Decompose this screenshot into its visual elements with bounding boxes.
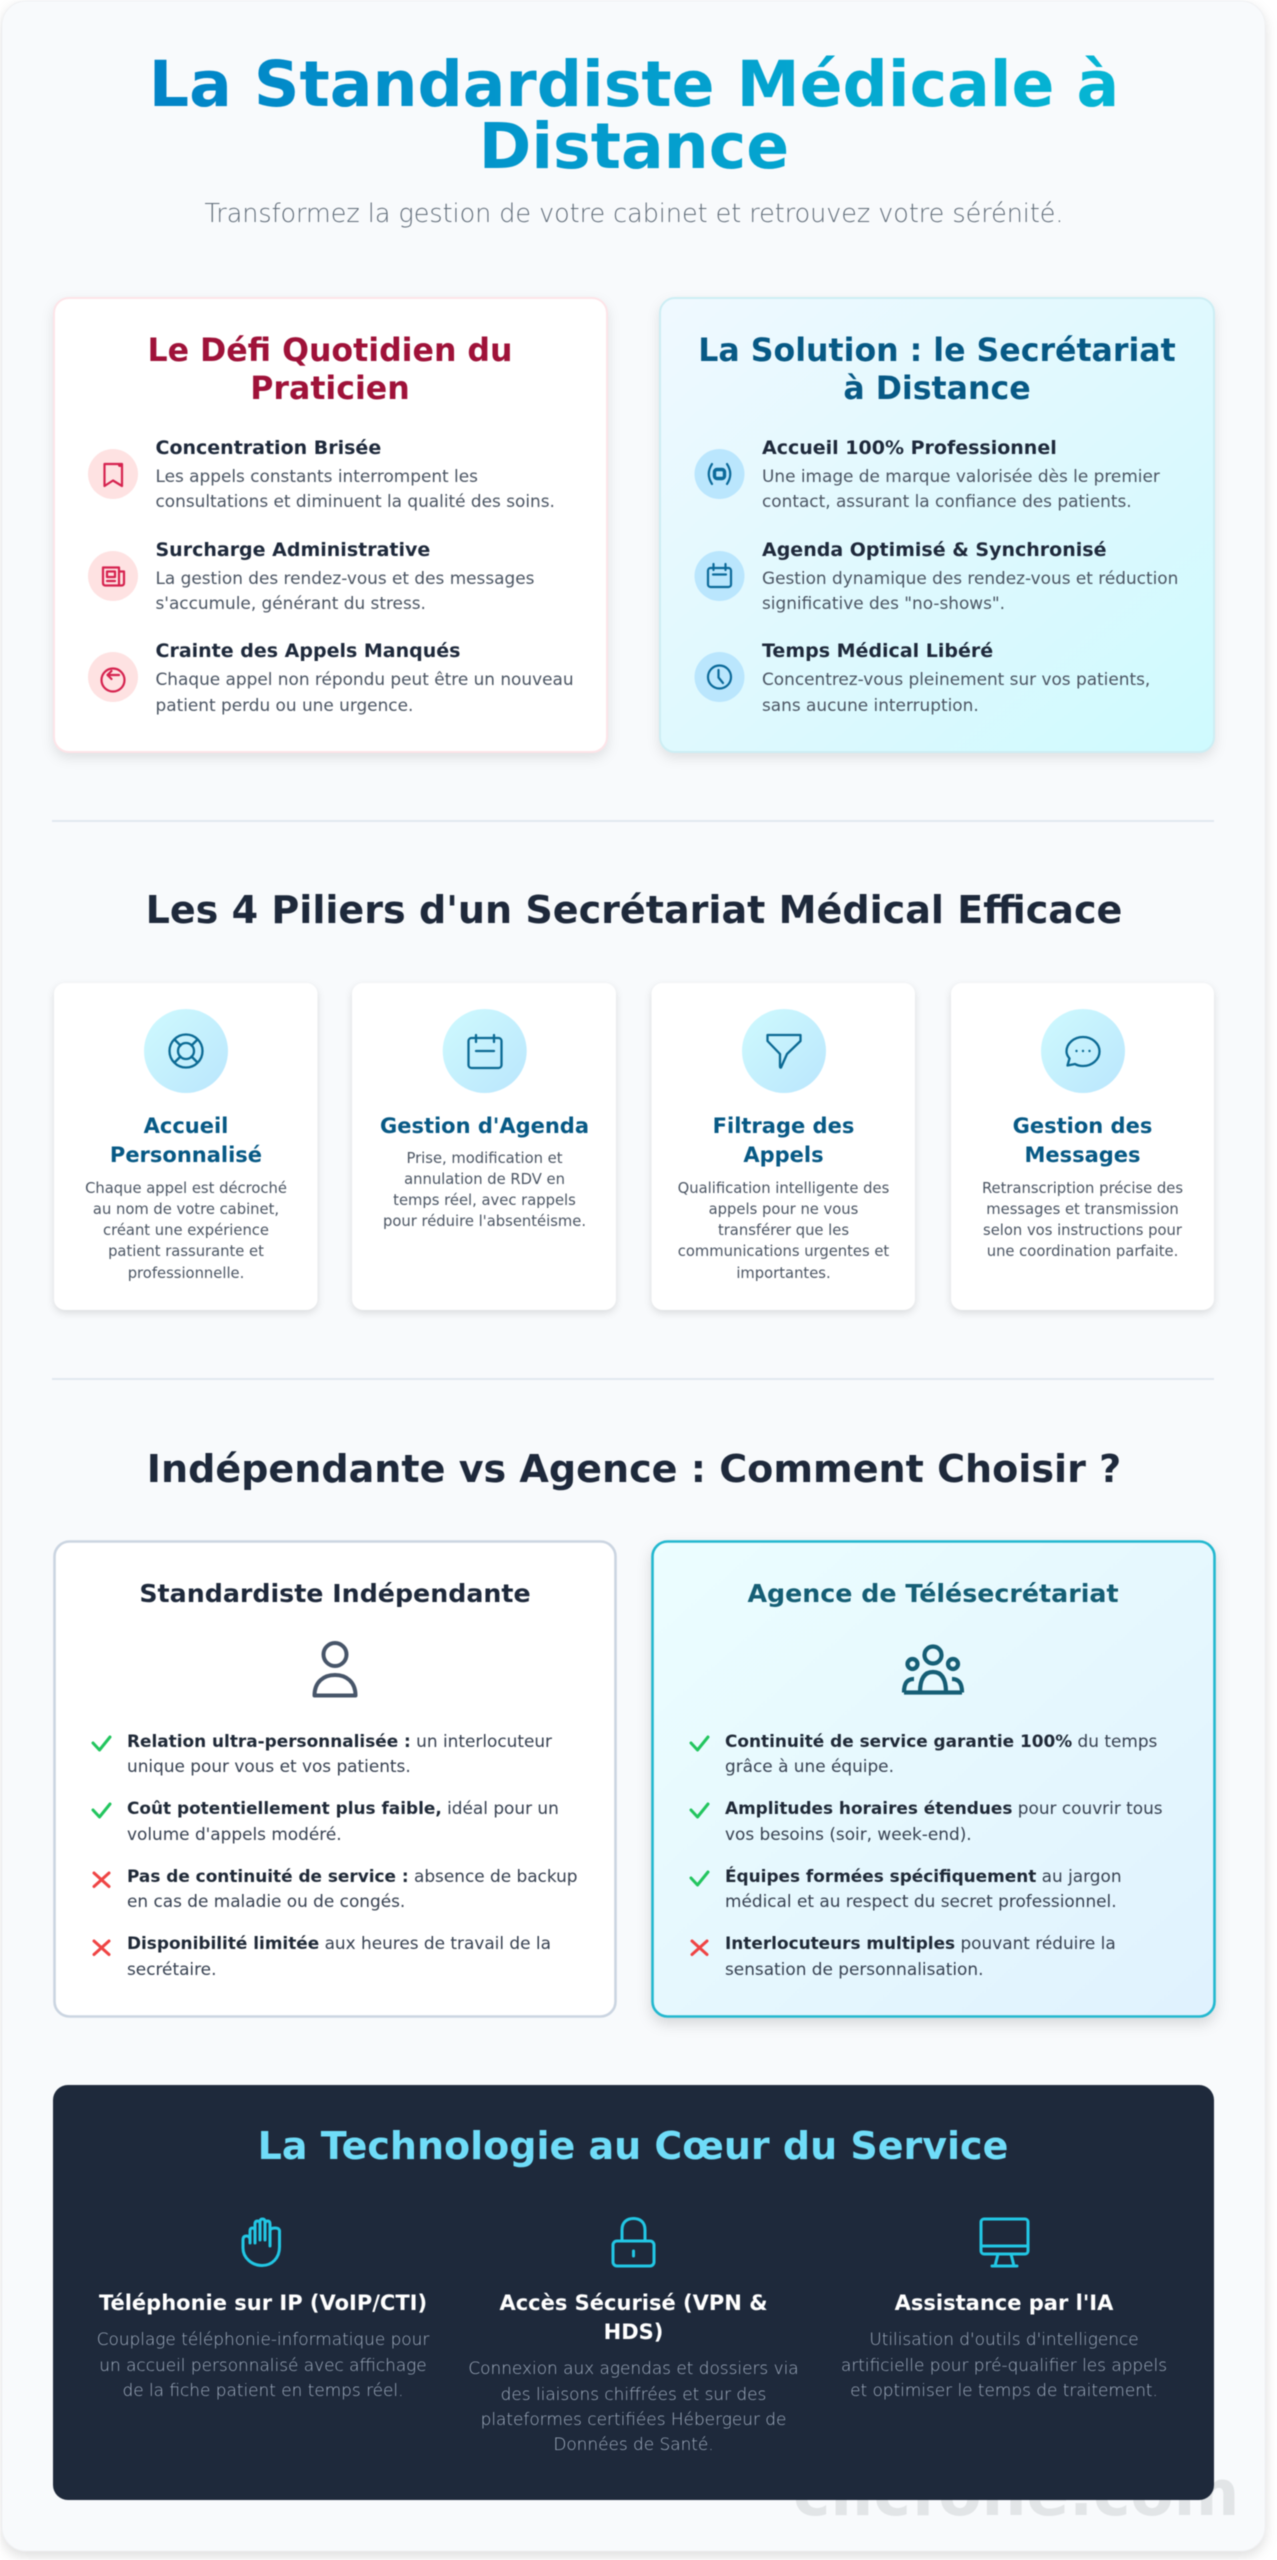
panel: standardiste indépendante [54, 1542, 616, 2016]
item: agenda optimisé [694, 539, 1178, 613]
heading: technologie: La Technologie au Cœur du Service [258, 2124, 1008, 2168]
column: accès sécurisé: HDS) [604, 2320, 663, 2344]
panel: agence de télésecrétariat [652, 1542, 1214, 2016]
icon: user [314, 1643, 356, 1696]
item: temps médical [694, 640, 1150, 715]
panel: pilier filtrage des appels: communications urgentes et [678, 1243, 889, 1260]
column: assistance IA [841, 2219, 1167, 2400]
item: temps médical: Temps Médical Libéré [762, 640, 993, 662]
panel: pilier gestion des messages: une coordination parfaite. [987, 1243, 1178, 1260]
list: indépendante: Coût potentiellement plus faible, idéal pour un [127, 1798, 559, 1818]
item: concentration brisée: Concentration Brisée [156, 437, 381, 459]
item: accueil professionnel [694, 437, 1160, 511]
panel: le défi quotidien [54, 298, 607, 752]
panel: pilier filtrage des appels: Qualification intelligente des [678, 1180, 889, 1197]
list: indépendante: secrétaire. [127, 1959, 216, 1979]
column: téléphonie [97, 2219, 429, 2400]
panel: pilier accueil personnalisé: créant une expérience [103, 1222, 269, 1239]
item: surcharge administrative: Surcharge Administrative [156, 539, 430, 561]
list: indépendante: unique pour vous et vos patients. [127, 1756, 411, 1776]
panel: pilier accueil personnalisé [54, 983, 318, 1310]
heading: indépendante vs agence: Indépendante vs Agence : Comment Choisir ? [147, 1447, 1121, 1491]
panel: pilier accueil personnalisé: Chaque appel est décroché [85, 1180, 287, 1197]
panel: la solution [660, 298, 1214, 752]
list: indépendante: Disponibilité limitée aux heures de travail de la [127, 1933, 551, 1953]
icon: lifebuoy [144, 1009, 228, 1093]
heading: défi: Praticien [250, 371, 410, 407]
item: crainte des appels manqués: Chaque appel non répondu peut être un nouveau [156, 669, 574, 689]
title: La Standardiste Médicale à [149, 47, 1119, 121]
column: téléphonie: Téléphonie sur IP (VoIP/CTI) [99, 2291, 427, 2315]
item: accueil professionnel: Une image de marque valorisée dès le premier [762, 466, 1160, 486]
column: accès sécurisé [468, 2218, 799, 2454]
column: téléphonie: de la fiche patient en temps réel. [122, 2380, 404, 2400]
heading: solution: La Solution : le Secrétariat [698, 333, 1176, 369]
panel: pilier gestion d'agenda: pour réduire l'absentéisme. [383, 1213, 586, 1230]
panel: pilier gestion d'agenda: Gestion d'Agenda [380, 1114, 589, 1138]
icon: team [904, 1646, 962, 1692]
panel: pilier accueil personnalisé: professionnelle. [128, 1265, 244, 1282]
item: accueil professionnel: contact, assurant la confiance des patients. [762, 491, 1132, 511]
panel: pilier filtrage des appels: Appels [743, 1143, 824, 1167]
panel: la technologie [53, 2085, 1214, 2500]
item: concentration brisée: consultations et diminuent la qualité des soins. [156, 491, 555, 511]
panel: pilier gestion d'agenda [352, 983, 616, 1310]
panel: pilier filtrage des appels: importantes. [736, 1265, 831, 1282]
column: accès sécurisé: Connexion aux agendas et dossiers via [468, 2358, 799, 2378]
item: temps médical: sans aucune interruption. [762, 695, 979, 715]
title: Distance [479, 109, 789, 183]
panel: pilier gestion d'agenda: Prise, modification et [406, 1150, 563, 1167]
panel: pilier gestion des messages: Messages [1024, 1143, 1141, 1167]
item: surcharge administrative: s'accumule, générant du stress. [156, 593, 426, 613]
list: agence: Amplitudes horaires étendues pour couvrir tous [725, 1798, 1163, 1818]
panel: pilier accueil personnalisé: patient rassurante et [108, 1243, 264, 1260]
item: agenda optimisé: Gestion dynamique des rendez-vous et réduction [762, 568, 1178, 588]
item: concentration brisée [88, 437, 555, 511]
list: agence: Continuité de service garantie 100% du temps [725, 1731, 1157, 1751]
list: indépendante: Relation ultra-personnalisée : un interlocuteur [127, 1731, 552, 1751]
column: assistance IA: artificielle pour pré-qualifier les appels [841, 2355, 1167, 2375]
icon: chat bubble [1041, 1009, 1125, 1093]
icon: lock [613, 2218, 654, 2266]
panel: pilier gestion des messages: messages et transmission [986, 1201, 1179, 1218]
heading: les 4 piliers: Les 4 Piliers d'un Secrétariat Médical Efficace [146, 888, 1122, 932]
watermark: clicfone.com [793, 2457, 1239, 2530]
icon: hand [243, 2219, 280, 2266]
item: accueil professionnel: Accueil 100% Professionnel [762, 437, 1057, 459]
list: agence: sensation de personnalisation. [725, 1959, 983, 1979]
panel: pilier filtrage des appels: transférer que les [718, 1222, 849, 1239]
panel: pilier gestion d'agenda: temps réel, avec rappels [393, 1192, 576, 1209]
column: accès sécurisé: des liaisons chiffrées et sur des [501, 2384, 766, 2404]
item: agenda optimisé: Agenda Optimisé & Synchronisé [762, 539, 1106, 561]
column: assistance IA: Assistance par l'IA [895, 2291, 1114, 2315]
list: agence: Équipes formées spécifiquement au jargon [725, 1865, 1122, 1886]
heading: solution: à Distance [843, 371, 1031, 407]
item: crainte des appels manqués [88, 640, 574, 715]
panel: pilier gestion des messages [951, 983, 1214, 1310]
heading: standardiste: Standardiste Indépendante [139, 1579, 531, 1608]
item: crainte des appels manqués: Crainte des Appels Manqués [156, 640, 460, 662]
column: accès sécurisé: Accès Sécurisé (VPN & [499, 2291, 768, 2315]
list: agence [691, 1731, 1163, 1979]
icon: calendar [443, 1009, 527, 1093]
column: accès sécurisé: plateformes certifiées Hébergeur de [481, 2409, 786, 2429]
column: téléphonie: un accueil personnalisé avec affichage [99, 2355, 427, 2375]
heading: défi [147, 333, 513, 407]
list: indépendante: volume d'appels modéré. [127, 1824, 342, 1844]
icon: monitor [981, 2219, 1028, 2266]
item: surcharge administrative [88, 539, 534, 613]
column: accès sécurisé: Données de Santé. [553, 2434, 714, 2454]
item: crainte des appels manqués: patient perdu ou une urgence. [156, 695, 413, 715]
panel: pilier gestion des messages: selon vos instructions pour [983, 1222, 1183, 1239]
panel: pilier gestion d'agenda: annulation de RDV en [404, 1171, 565, 1188]
heading: défi: Le Défi Quotidien du [147, 333, 513, 369]
item: temps médical: Concentrez-vous pleinement sur vos patients, [762, 669, 1150, 689]
panel: pilier gestion des messages: Retranscription précise des [982, 1180, 1183, 1197]
panel: pilier filtrage des appels: Filtrage des [713, 1114, 854, 1138]
title [149, 47, 1119, 183]
column: assistance IA: Utilisation d'outils d'intelligence [869, 2329, 1139, 2349]
list: indépendante: en cas de maladie ou de congés. [127, 1891, 405, 1911]
item: concentration brisée: Les appels constants interrompent les [156, 466, 478, 486]
list: agence: Interlocuteurs multiples pouvant réduire la [725, 1933, 1116, 1953]
list: agence: grâce à une équipe. [725, 1756, 894, 1776]
panel: pilier accueil personnalisé: au nom de votre cabinet, [93, 1201, 279, 1218]
icon: funnel [742, 1009, 826, 1093]
list: agence: médical et au respect du secret professionnel. [725, 1891, 1117, 1911]
column: assistance IA: et optimiser le temps de traitement. [850, 2380, 1158, 2400]
item: agenda optimisé: significative des "no-shows". [762, 593, 1005, 613]
heading: agence: Agence de Télésecrétariat [747, 1579, 1119, 1608]
subtitle: Transformez la gestion de votre cabinet et retrouvez votre sérénité. [204, 198, 1064, 228]
heading: solution [698, 333, 1176, 407]
list: indépendante: Pas de continuité de service : absence de backup [127, 1866, 578, 1886]
panel: pilier filtrage des appels [652, 983, 915, 1310]
panel: pilier filtrage des appels: appels pour ne vous [709, 1201, 858, 1218]
panel: pilier accueil personnalisé: Accueil [144, 1114, 228, 1138]
list: agence: vos besoins (soir, week-end). [725, 1824, 972, 1844]
column: téléphonie: Couplage téléphonie-informatique pour [97, 2329, 429, 2349]
panel: pilier gestion des messages: Gestion des [1013, 1114, 1152, 1138]
list: indépendante [93, 1731, 578, 1979]
item: surcharge administrative: La gestion des rendez-vous et des messages [156, 568, 534, 588]
panel: pilier accueil personnalisé: Personnalisé [110, 1143, 262, 1167]
